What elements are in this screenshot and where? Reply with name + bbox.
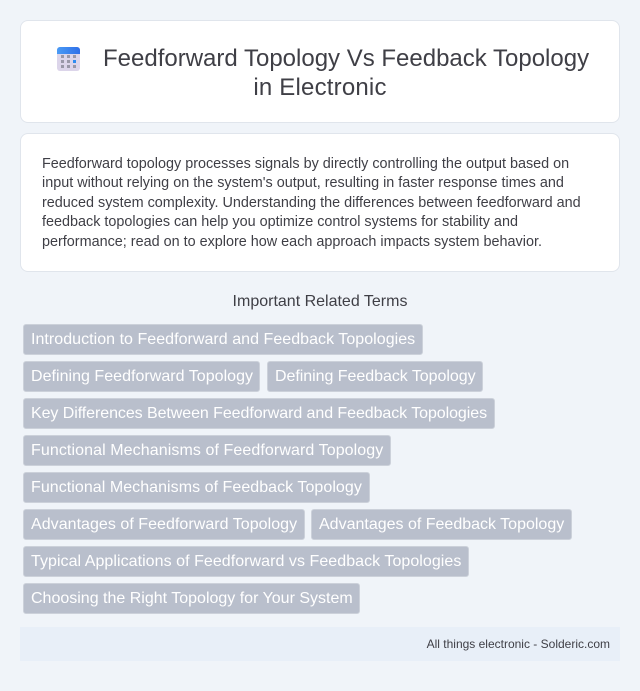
tag: Typical Applications of Feedforward vs Feedback Topologies (31, 553, 461, 570)
tag: Functional Mechanisms of Feedforward Topology (31, 442, 383, 459)
description text (42, 156, 581, 250)
tag (23, 472, 370, 503)
description text: input without relying on the system's output, resulting in faster response times and (42, 175, 564, 191)
tag: Defining Feedback Topology (275, 368, 476, 385)
footer (20, 627, 620, 661)
title (103, 45, 589, 101)
tag: Advantages of Feedback Topology (319, 516, 564, 533)
panel: description (20, 133, 620, 272)
title: in Electronic (253, 74, 387, 101)
tag (23, 546, 469, 577)
tag (23, 398, 495, 429)
tag: Defining Feedforward Topology (31, 368, 253, 385)
tag (23, 583, 360, 614)
tag: Functional Mechanisms of Feedback Topology (31, 479, 362, 496)
tag (267, 361, 483, 392)
title: Feedforward Topology Vs Feedback Topology (103, 45, 589, 72)
tag: Key Differences Between Feedforward and Feedback Topologies (31, 405, 487, 422)
tag: Choosing the Right Topology for Your System (31, 590, 353, 607)
description text: reduced system complexity. Understanding the differences between feedforward and (42, 195, 581, 211)
panel: title card (20, 20, 620, 123)
tag (23, 324, 423, 355)
description text: feedback topologies can help you optimize control systems for stability and (42, 214, 518, 230)
icon: calendar (57, 47, 80, 71)
tag: Introduction to Feedforward and Feedback Topologies (31, 331, 415, 348)
tag (23, 509, 305, 540)
tag (311, 509, 572, 540)
tag (23, 435, 391, 466)
description text: performance; read on to explore how each approach impacts system behavior. (42, 234, 542, 250)
tag (23, 361, 260, 392)
description text: Feedforward topology processes signals by directly controlling the output based on (42, 156, 569, 172)
footer: All things electronic - Solderic.com (427, 637, 610, 651)
heading: important related terms: Important Related Terms (233, 293, 407, 310)
tag: Advantages of Feedforward Topology (31, 516, 297, 533)
